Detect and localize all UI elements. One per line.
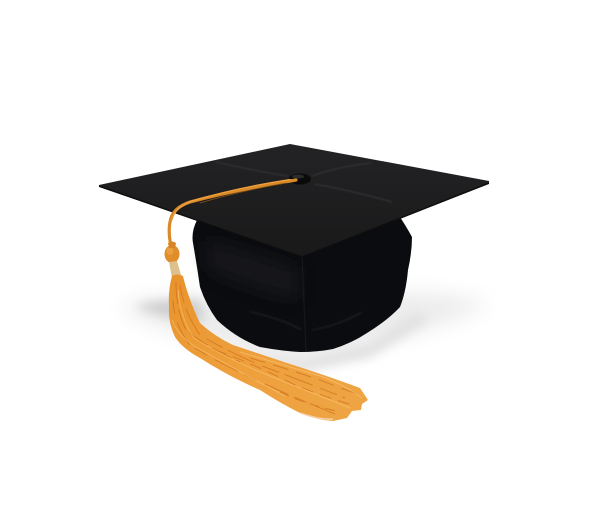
tassel tip knot xyxy=(164,242,180,263)
fibers xyxy=(173,282,358,414)
cast shadow xyxy=(118,292,490,372)
underside shadow edge xyxy=(99,183,489,257)
tassel cord xyxy=(169,180,296,246)
tassel fringe xyxy=(169,274,368,421)
bottom pleat xyxy=(250,312,362,330)
mortarboard xyxy=(99,144,489,257)
button xyxy=(289,174,311,184)
cap body xyxy=(192,214,412,352)
fabric highlights xyxy=(205,240,298,300)
front seam xyxy=(302,256,306,351)
frayed end highlights xyxy=(300,413,333,419)
tassel collar xyxy=(169,261,181,278)
board seams xyxy=(216,162,288,176)
